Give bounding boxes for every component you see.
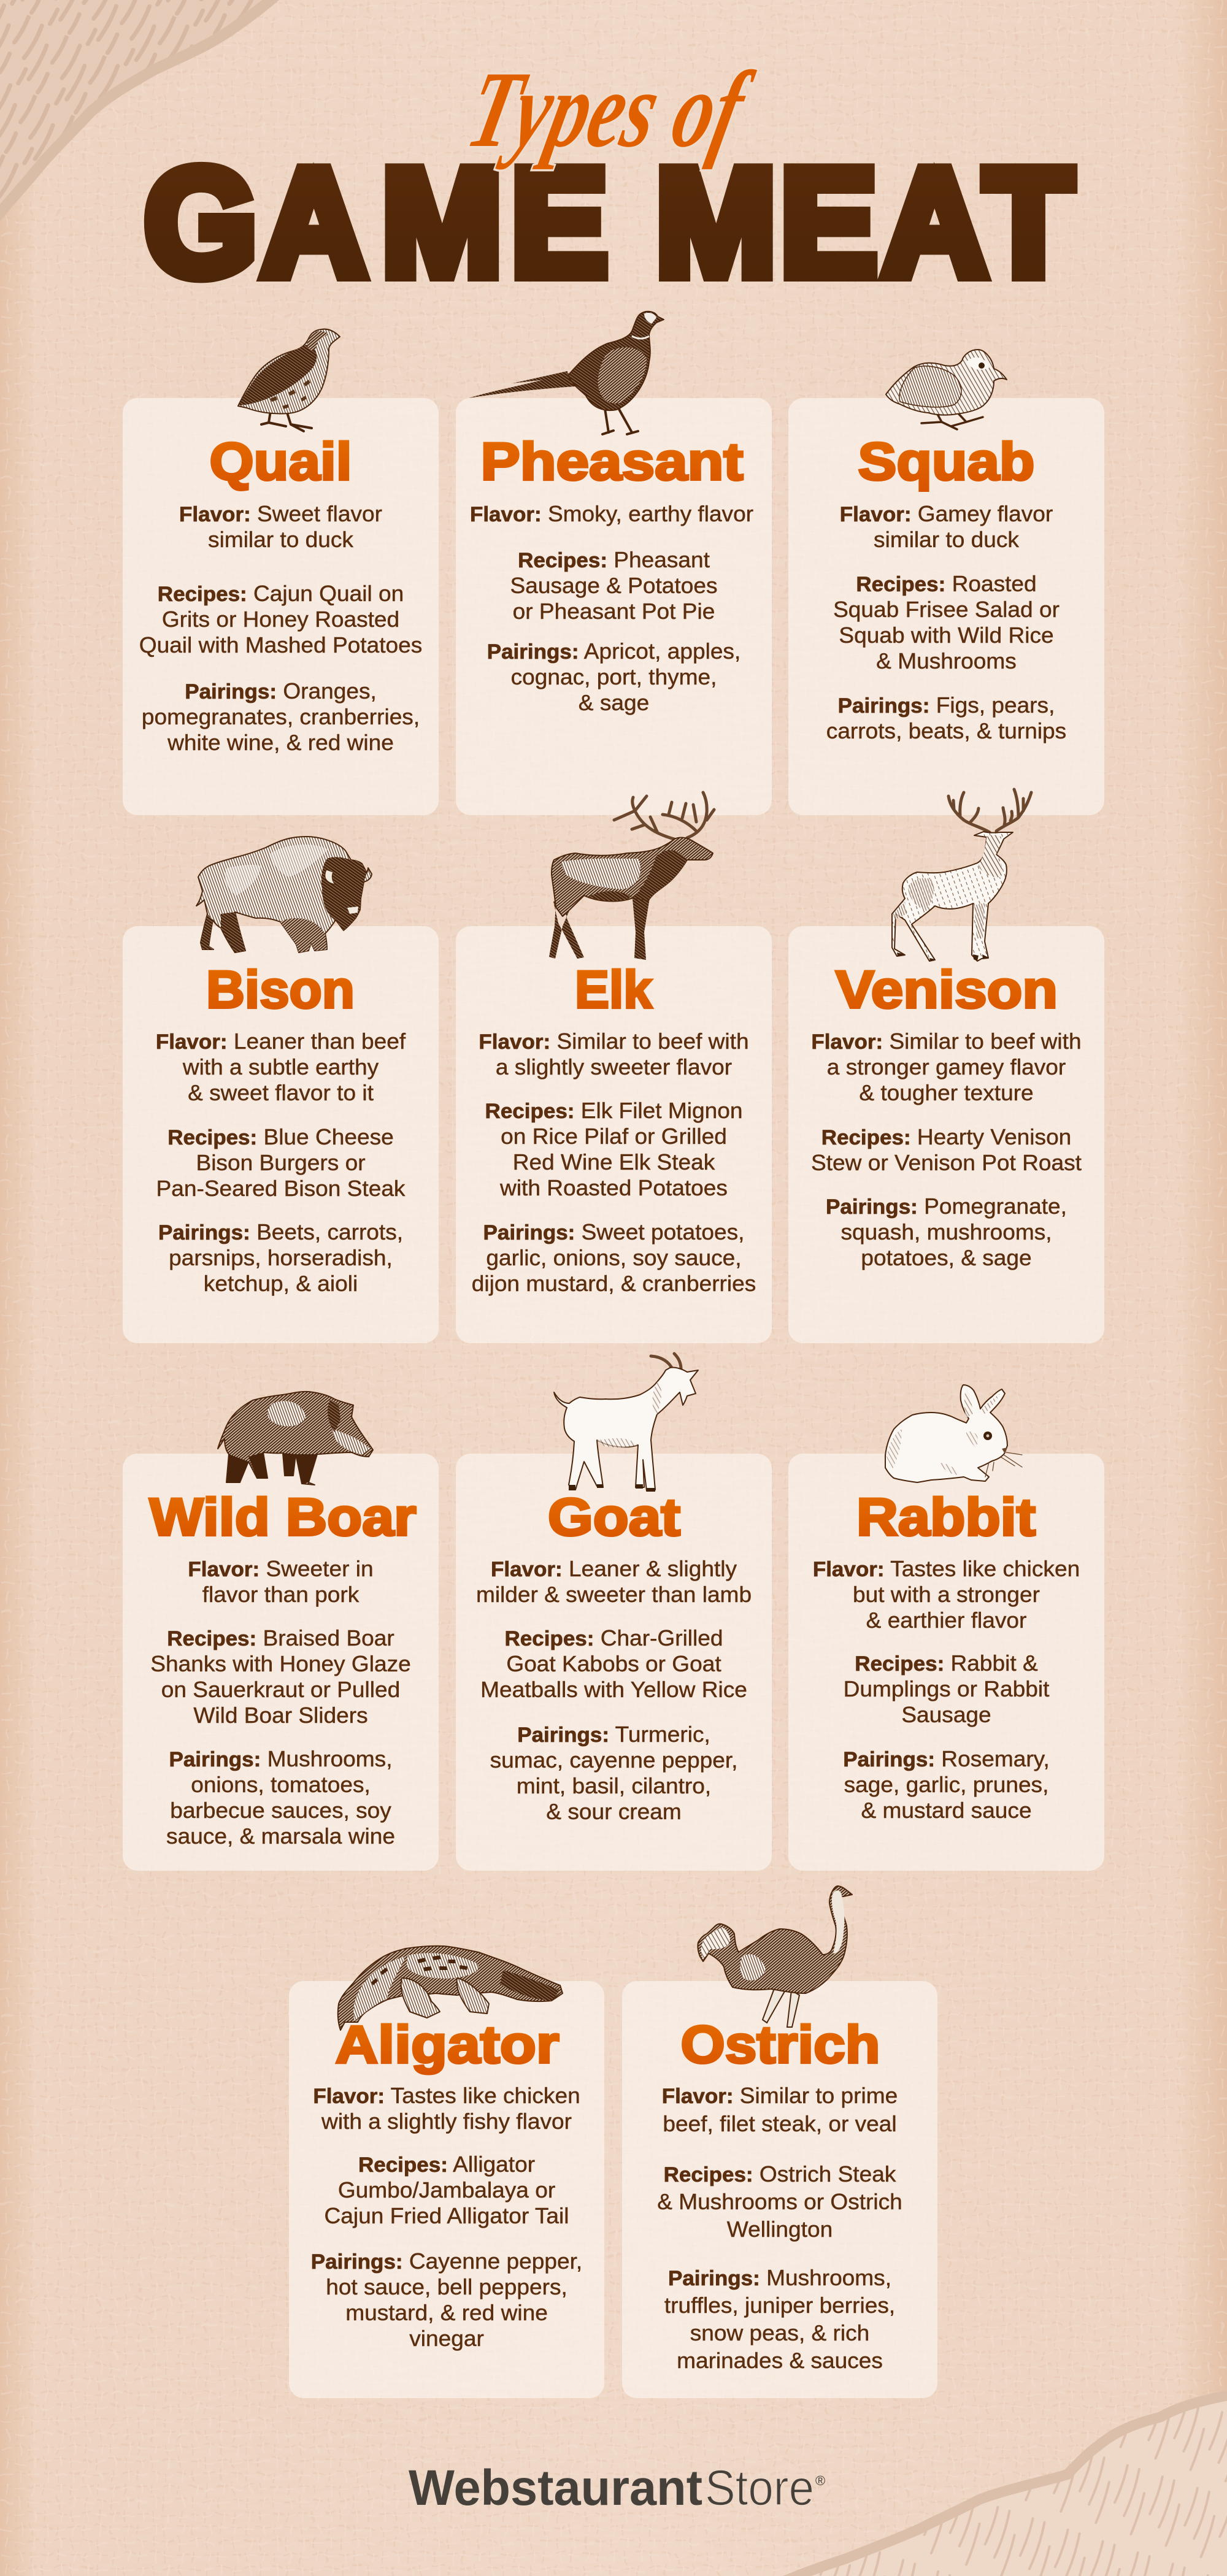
pairings: cognac, port, thyme, — [511, 664, 717, 689]
flavor — [156, 1029, 406, 1105]
flavor: Flavor: Sweeter in — [188, 1556, 374, 1581]
pairings — [158, 1219, 403, 1296]
recipes: with Roasted Potatoes — [499, 1175, 728, 1200]
recipes: & Mushrooms or Ostrich — [657, 2189, 902, 2214]
pairings: pomegranates, cranberries, — [142, 704, 420, 729]
recipes: Red Wine Elk Steak — [513, 1149, 715, 1175]
heading: Aligator — [335, 2015, 560, 2074]
flavor: but with a stronger — [853, 1582, 1040, 1607]
pairings: Pairings: Cayenne pepper, — [311, 2248, 582, 2274]
pairings: mint, basil, cilantro, — [517, 1773, 711, 1798]
pairings — [487, 638, 740, 715]
flavor: Flavor: Leaner & slightly — [491, 1556, 737, 1581]
pairings: marinades & sauces — [677, 2348, 883, 2373]
pairings: squash, mushrooms, — [840, 1219, 1052, 1244]
title line: Types of: Types of — [458, 49, 763, 170]
flavor: Flavor: Similar to beef with — [479, 1029, 749, 1054]
pairings: mustard, & red wine — [345, 2300, 548, 2325]
recipes: on Rice Pilaf or Grilled — [501, 1124, 727, 1149]
pairings: Pairings: Figs, pears, — [838, 692, 1055, 718]
recipes: Squab Frisee Salad or — [833, 597, 1060, 622]
panel: Goat — [456, 1354, 772, 1871]
pairings: Pairings: Mushrooms, — [668, 2265, 891, 2290]
card — [123, 926, 439, 1343]
recipes: Recipes: Elk Filet Mignon — [485, 1098, 742, 1123]
recipes: Recipes: Alligator — [358, 2152, 535, 2177]
icon: quail — [238, 329, 340, 431]
pairings: hot sauce, bell peppers, — [326, 2274, 567, 2299]
flavor: & earthier flavor — [866, 1608, 1026, 1633]
pairings: Pairings: Apricot, apples, — [487, 638, 740, 664]
flavor: with a slightly fishy flavor — [321, 2109, 572, 2134]
flavor: Flavor: Tastes like chicken — [813, 1556, 1080, 1581]
flavor: milder & sweeter than lamb — [476, 1582, 752, 1607]
card — [456, 1454, 772, 1871]
icon: goat — [554, 1354, 698, 1492]
recipes — [657, 2161, 902, 2242]
pairings: vinegar — [409, 2326, 484, 2351]
pairings: garlic, onions, soy sauce, — [486, 1245, 742, 1270]
pairings: truffles, juniper berries, — [664, 2293, 895, 2318]
pairings: onions, tomatoes, — [191, 1772, 371, 1797]
card — [123, 1454, 439, 1871]
recipes: Bison Burgers or — [196, 1150, 366, 1175]
panel: Squab — [788, 350, 1104, 815]
heading: Elk — [575, 960, 652, 1019]
pairings: sauce, & marsala wine — [166, 1823, 395, 1849]
icon: ostrich — [698, 1886, 852, 2027]
heading: Quail — [210, 432, 352, 491]
pairings: & sour cream — [546, 1799, 682, 1824]
card — [289, 1981, 604, 2398]
flavor: & sweet flavor to it — [188, 1080, 374, 1105]
pairings: ketchup, & aioli — [204, 1271, 358, 1296]
logo: WebstaurantStore: Webstaurant — [409, 2460, 702, 2516]
flavor — [479, 1029, 749, 1079]
heading: Rabbit — [856, 1488, 1036, 1547]
decorative texture: top-left corner — [0, 0, 282, 224]
flavor — [662, 2083, 898, 2136]
recipes — [480, 1625, 747, 1702]
heading: Bison — [206, 960, 355, 1019]
recipes — [811, 1124, 1082, 1175]
recipes: Wellington — [727, 2217, 833, 2242]
recipes: Recipes: Cajun Quail on — [158, 581, 404, 606]
icon: bison — [196, 837, 372, 953]
icon: squab — [886, 350, 1007, 429]
recipes: Shanks with Honey Glaze — [150, 1651, 411, 1676]
panel: Pheasant — [456, 312, 772, 815]
recipes: Stew or Venison Pot Roast — [811, 1150, 1082, 1175]
flavor: a slightly sweeter flavor — [496, 1054, 732, 1079]
panel: Elk — [456, 792, 772, 1343]
pairings — [826, 692, 1066, 743]
panel: Quail — [123, 329, 439, 815]
flavor: Flavor: Sweet flavor — [179, 501, 382, 526]
recipes: on Sauerkraut or Pulled — [161, 1677, 400, 1702]
recipes: Goat Kabobs or Goat — [506, 1651, 721, 1676]
recipes — [139, 581, 422, 657]
pairings: sage, garlic, prunes, — [844, 1772, 1048, 1797]
pairings — [142, 678, 420, 755]
recipes: Recipes: Pheasant — [518, 547, 710, 572]
heading: Pheasant — [481, 432, 744, 491]
heading: Venison — [836, 960, 1058, 1019]
flavor: Flavor: Gamey flavor — [840, 501, 1053, 526]
title — [145, 49, 1072, 307]
card — [456, 398, 772, 815]
pairings: barbecue sauces, soy — [170, 1798, 392, 1823]
recipes: Sausage — [901, 1702, 991, 1727]
icon: pheasant — [469, 312, 664, 434]
logo: WebstaurantStore: Store — [705, 2460, 814, 2516]
pairings: Pairings: Sweet potatoes, — [483, 1219, 744, 1244]
flavor: beef, filet steak, or veal — [663, 2111, 897, 2136]
flavor: similar to duck — [208, 527, 354, 552]
panel: Venison — [788, 789, 1104, 1343]
recipes: Meatballs with Yellow Rice — [480, 1677, 747, 1702]
flavor — [813, 1556, 1080, 1633]
card — [788, 926, 1104, 1343]
flavor: Flavor: Smoky, earthy flavor — [470, 501, 753, 526]
recipes: Recipes: Blue Cheese — [167, 1124, 394, 1149]
recipes — [485, 1098, 742, 1200]
panel: Wild Boar — [123, 1392, 439, 1871]
recipes — [156, 1124, 406, 1201]
card — [123, 398, 439, 815]
flavor: flavor than pork — [202, 1582, 360, 1607]
panel: Aligator — [289, 1946, 604, 2398]
flavor: similar to duck — [874, 527, 1020, 552]
pairings: snow peas, & rich — [690, 2320, 869, 2345]
card — [788, 1454, 1104, 1871]
pairings: dijon mustard, & cranberries — [472, 1271, 756, 1296]
flavor: Flavor: Leaner than beef — [156, 1029, 406, 1054]
card — [622, 1981, 937, 2398]
pairings: parsnips, horseradish, — [169, 1245, 393, 1270]
recipes — [150, 1625, 411, 1728]
recipes: Wild Boar Sliders — [193, 1703, 368, 1728]
recipes — [510, 547, 717, 624]
pairings — [826, 1194, 1067, 1270]
pairings — [311, 2248, 582, 2351]
heading: Squab — [858, 432, 1034, 491]
panel: Rabbit — [788, 1385, 1104, 1871]
flavor: with a subtle earthy — [182, 1054, 379, 1079]
panel: Ostrich — [622, 1886, 937, 2398]
flavor — [476, 1556, 752, 1607]
recipes — [844, 1650, 1049, 1727]
pairings: Pairings: Turmeric, — [517, 1722, 710, 1747]
logo: WebstaurantStore: ® — [815, 2473, 825, 2488]
heading: Ostrich — [681, 2015, 880, 2074]
pairings: Pairings: Oranges, — [185, 678, 377, 703]
recipes: Recipes: Roasted — [856, 571, 1037, 596]
icon: alligator — [338, 1946, 563, 2030]
heading: Goat — [548, 1488, 680, 1547]
recipes: or Pheasant Pot Pie — [513, 599, 715, 624]
recipes: Recipes: Braised Boar — [167, 1625, 394, 1650]
pairings: & sage — [579, 690, 649, 715]
recipes: Quail with Mashed Potatoes — [139, 632, 422, 657]
recipes: Sausage & Potatoes — [510, 573, 717, 598]
flavor — [188, 1556, 374, 1607]
flavor: & tougher texture — [859, 1080, 1034, 1105]
recipes: Recipes: Char-Grilled — [504, 1625, 723, 1650]
flavor — [840, 501, 1053, 552]
recipes: Recipes: Hearty Venison — [821, 1124, 1071, 1149]
recipes: Recipes: Ostrich Steak — [664, 2161, 896, 2187]
pairings: Pairings: Rosemary, — [843, 1746, 1050, 1771]
icon: rabbit — [885, 1385, 1022, 1482]
pairings — [166, 1746, 395, 1849]
flavor: Flavor: Similar to prime — [662, 2083, 898, 2108]
pairings — [490, 1722, 737, 1824]
recipes: Dumplings or Rabbit — [844, 1676, 1049, 1701]
heading: Wild Boar — [150, 1488, 416, 1547]
recipes: & Mushrooms — [876, 648, 1017, 673]
recipes: Cajun Fried Alligator Tail — [324, 2203, 569, 2228]
pairings: Pairings: Pomegranate, — [826, 1194, 1067, 1219]
pairings: & mustard sauce — [861, 1798, 1032, 1823]
flavor: a stronger gamey flavor — [827, 1054, 1066, 1079]
flavor — [811, 1029, 1082, 1105]
pairings: potatoes, & sage — [861, 1245, 1032, 1270]
decorative texture: bottom-right corner — [779, 2386, 1227, 2576]
flavor — [179, 501, 382, 552]
pairings — [664, 2265, 895, 2373]
flavor: Flavor: Similar to beef with — [811, 1029, 1082, 1054]
recipes: Squab with Wild Rice — [839, 623, 1054, 648]
pairings — [472, 1219, 756, 1296]
recipes: Gumbo/Jambalaya or — [338, 2177, 555, 2202]
recipes: Recipes: Rabbit & — [855, 1650, 1038, 1676]
card — [788, 398, 1104, 815]
icon: wild boar — [218, 1392, 373, 1485]
icon: elk — [549, 792, 714, 960]
recipes — [324, 2152, 569, 2228]
pairings: Pairings: Beets, carrots, — [158, 1219, 403, 1244]
pairings: white wine, & red wine — [167, 730, 394, 755]
recipes — [833, 571, 1060, 673]
panel: Bison — [123, 837, 439, 1343]
pairings: carrots, beats, & turnips — [826, 718, 1066, 743]
card — [456, 926, 772, 1343]
pairings: Pairings: Mushrooms, — [169, 1746, 393, 1771]
pairings — [843, 1746, 1050, 1823]
title line: GAME MEAT: GAME MEAT — [145, 137, 1072, 307]
icon: deer — [892, 789, 1031, 961]
recipes: Grits or Honey Roasted — [162, 607, 399, 632]
flavor — [313, 2083, 580, 2134]
recipes: Pan-Seared Bison Steak — [156, 1176, 406, 1201]
pairings: sumac, cayenne pepper, — [490, 1747, 737, 1773]
flavor: Flavor: Tastes like chicken — [313, 2083, 580, 2108]
